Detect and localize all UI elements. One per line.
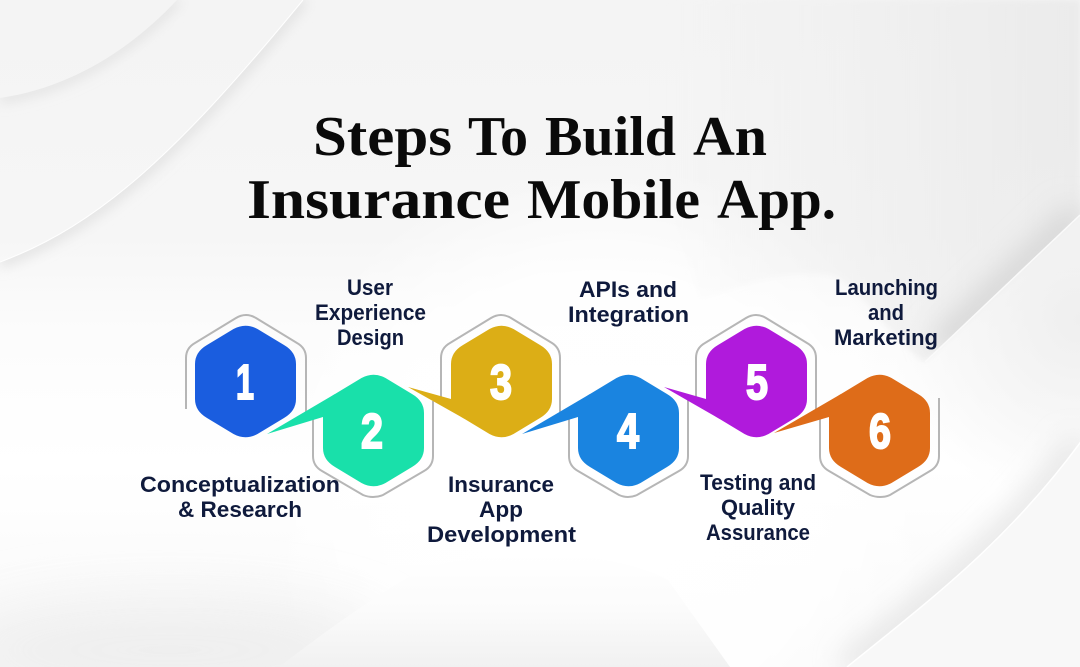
step 1 hexagon — [195, 326, 296, 437]
step 1 outline — [186, 315, 306, 412]
label: Insurance App Development: Insurance — [448, 472, 554, 497]
number 2: 2 — [361, 405, 383, 459]
label: APIs and Integration — [568, 277, 689, 327]
step 4 hexagon — [522, 375, 679, 486]
label: Insurance App Development — [427, 472, 577, 547]
title: Steps — [313, 106, 452, 168]
label: User Experience Design: User — [347, 275, 393, 300]
label: Conceptualization & Research: Conceptualization — [140, 472, 340, 497]
label: APIs and Integration: Integration — [568, 302, 689, 327]
step 3 hexagon — [408, 326, 552, 437]
step 2 outline — [313, 401, 433, 497]
label: Testing and Quality Assurance: Testing and — [700, 470, 816, 495]
title: Insurance — [247, 169, 510, 231]
number 5: 5 — [746, 356, 768, 410]
label: Conceptualization & Research: & Research — [178, 497, 302, 522]
label: Launching and Marketing: Launching — [835, 275, 938, 300]
step 3 outline — [441, 315, 560, 412]
label: User Experience Design: Experience — [315, 300, 426, 325]
step 5 hexagon — [664, 326, 807, 437]
label: User Experience Design: Design — [337, 325, 404, 350]
label: Launching and Marketing — [834, 275, 938, 350]
step 6 hexagon — [774, 375, 930, 486]
number 3: 3 — [490, 356, 512, 410]
step 5 outline — [696, 315, 816, 410]
label: Launching and Marketing: Marketing — [834, 325, 938, 350]
title: Mobile — [527, 169, 700, 231]
label: Launching and Marketing: and — [868, 300, 904, 325]
title: To — [468, 106, 528, 168]
label: Testing and Quality Assurance: Quality — [721, 495, 795, 520]
label: Conceptualization & Research — [140, 472, 340, 522]
title: Build — [545, 106, 676, 168]
number 1: 1 — [236, 356, 254, 410]
label: Insurance App Development: Development — [427, 522, 577, 547]
step 2 hexagon — [267, 375, 424, 486]
label: Testing and Quality Assurance — [700, 470, 816, 545]
label: User Experience Design — [315, 275, 426, 350]
number 4: 4 — [617, 405, 639, 459]
title: An — [693, 106, 767, 168]
title — [247, 106, 836, 231]
label: Insurance App Development: App — [479, 497, 523, 522]
step 4 outline — [569, 400, 688, 497]
label: Testing and Quality Assurance: Assurance — [706, 520, 810, 545]
number 6: 6 — [869, 405, 891, 459]
label: APIs and Integration: APIs and — [579, 277, 677, 302]
step 6 outline — [820, 398, 939, 497]
title: App. — [717, 169, 836, 231]
